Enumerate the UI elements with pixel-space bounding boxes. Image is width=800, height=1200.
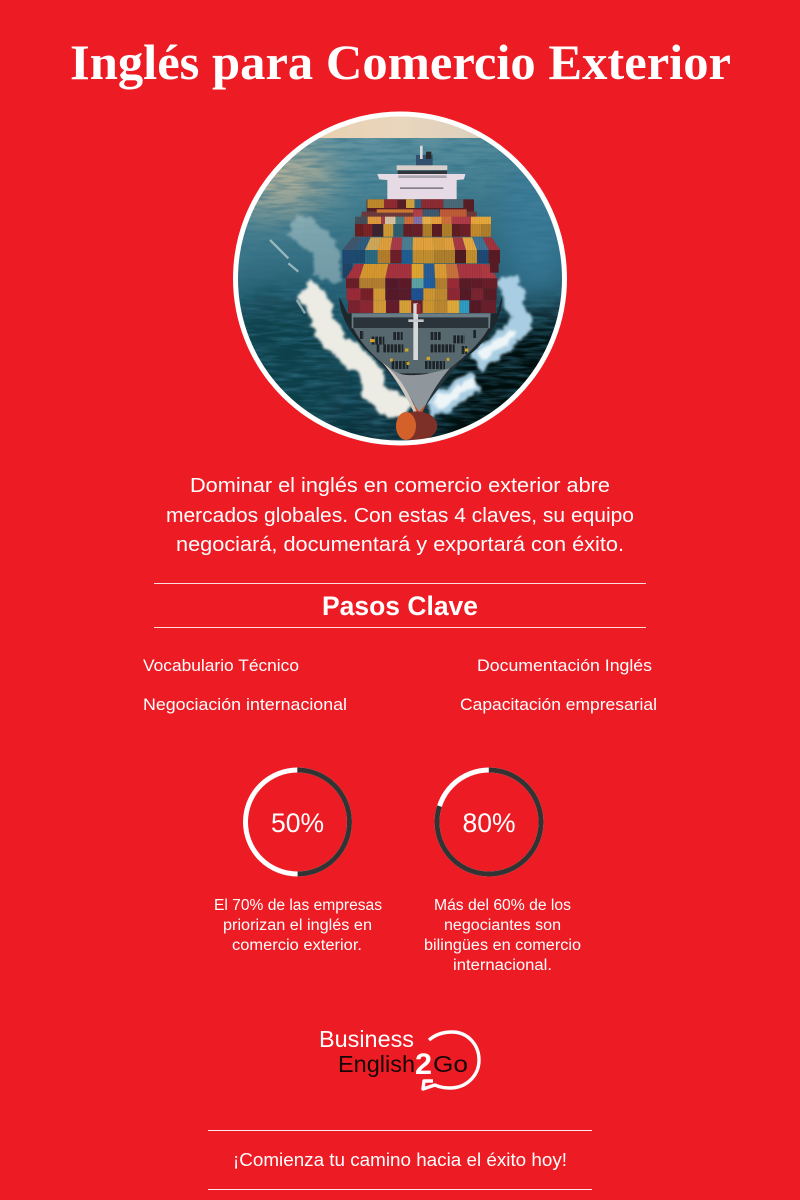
stat text: 60%: Más del 60% de los <box>434 897 571 914</box>
heading: pasos clave: Pasos Clave <box>322 591 478 621</box>
stat text: 70%: El 70% de las empresas <box>214 897 382 914</box>
stat text: 70%: comercio exterior. <box>232 937 362 954</box>
tier E tops <box>343 263 353 278</box>
intro paragraph: Dominar el inglés en comercio exterior abre <box>190 474 610 497</box>
wake right <box>428 277 522 407</box>
stat text: 70% <box>214 897 382 954</box>
logo: Business English 2 Go: English <box>338 1051 415 1077</box>
footer call to action: ¡Comienza tu camino hacia el éxito hoy! <box>233 1150 567 1170</box>
ship superstructure <box>416 155 433 167</box>
deck machinery <box>360 334 477 365</box>
progress ring: 50% <box>246 770 350 874</box>
intro paragraph <box>166 474 634 556</box>
infographic canvas <box>72 44 730 1190</box>
key steps list: Vocabulario Técnico <box>143 656 299 675</box>
photo white ring <box>236 114 564 443</box>
progress ring: 80%: 80% <box>462 808 516 838</box>
stat text: 60%: internacional. <box>453 957 552 974</box>
tier C tops <box>355 217 368 224</box>
intro paragraph: negociará, documentará y exportará con éxito. <box>176 533 624 556</box>
logo: Business English 2 Go: 2 <box>415 1048 432 1081</box>
stat text: 60%: negociantes son <box>444 917 561 934</box>
logo: Business English 2 Go <box>319 1026 479 1089</box>
stat text: 70%: priorizan el inglés en <box>223 917 372 934</box>
logo: Business English 2 Go: Business <box>319 1026 414 1052</box>
tier A <box>367 199 474 212</box>
circular photo: container ship <box>233 112 567 446</box>
intro paragraph: mercados globales. Con estas 4 claves, su equipo <box>166 504 634 527</box>
title: Inglés para Comercio Exterior <box>70 34 731 90</box>
stat text: 60%: bilingües en comercio <box>424 937 581 954</box>
tier E row 2 <box>347 288 361 300</box>
tier B <box>362 212 477 217</box>
key steps list <box>143 656 657 714</box>
bulbous bow <box>396 411 437 441</box>
tier C fronts <box>355 224 368 237</box>
logo: Business English 2 Go: Go <box>433 1051 468 1077</box>
key steps list: Negociación internacional <box>143 695 347 714</box>
key steps list: Capacitación empresarial <box>460 695 657 714</box>
tier D tops <box>342 237 362 250</box>
logo speech bubble <box>423 1032 479 1089</box>
stat text: 60% <box>424 897 581 974</box>
tier D fronts <box>342 250 354 263</box>
wake left <box>305 290 408 410</box>
progress ring: 50%: 50% <box>271 808 324 838</box>
photo contents <box>238 116 562 440</box>
hull and deck <box>339 297 502 417</box>
tier E row 1 <box>346 278 359 288</box>
wake left upper <box>292 225 328 280</box>
progress ring: 80% <box>437 770 541 874</box>
key steps list: Documentación Inglés <box>477 656 652 675</box>
tier E row 3 <box>348 300 360 313</box>
mast <box>413 303 418 360</box>
